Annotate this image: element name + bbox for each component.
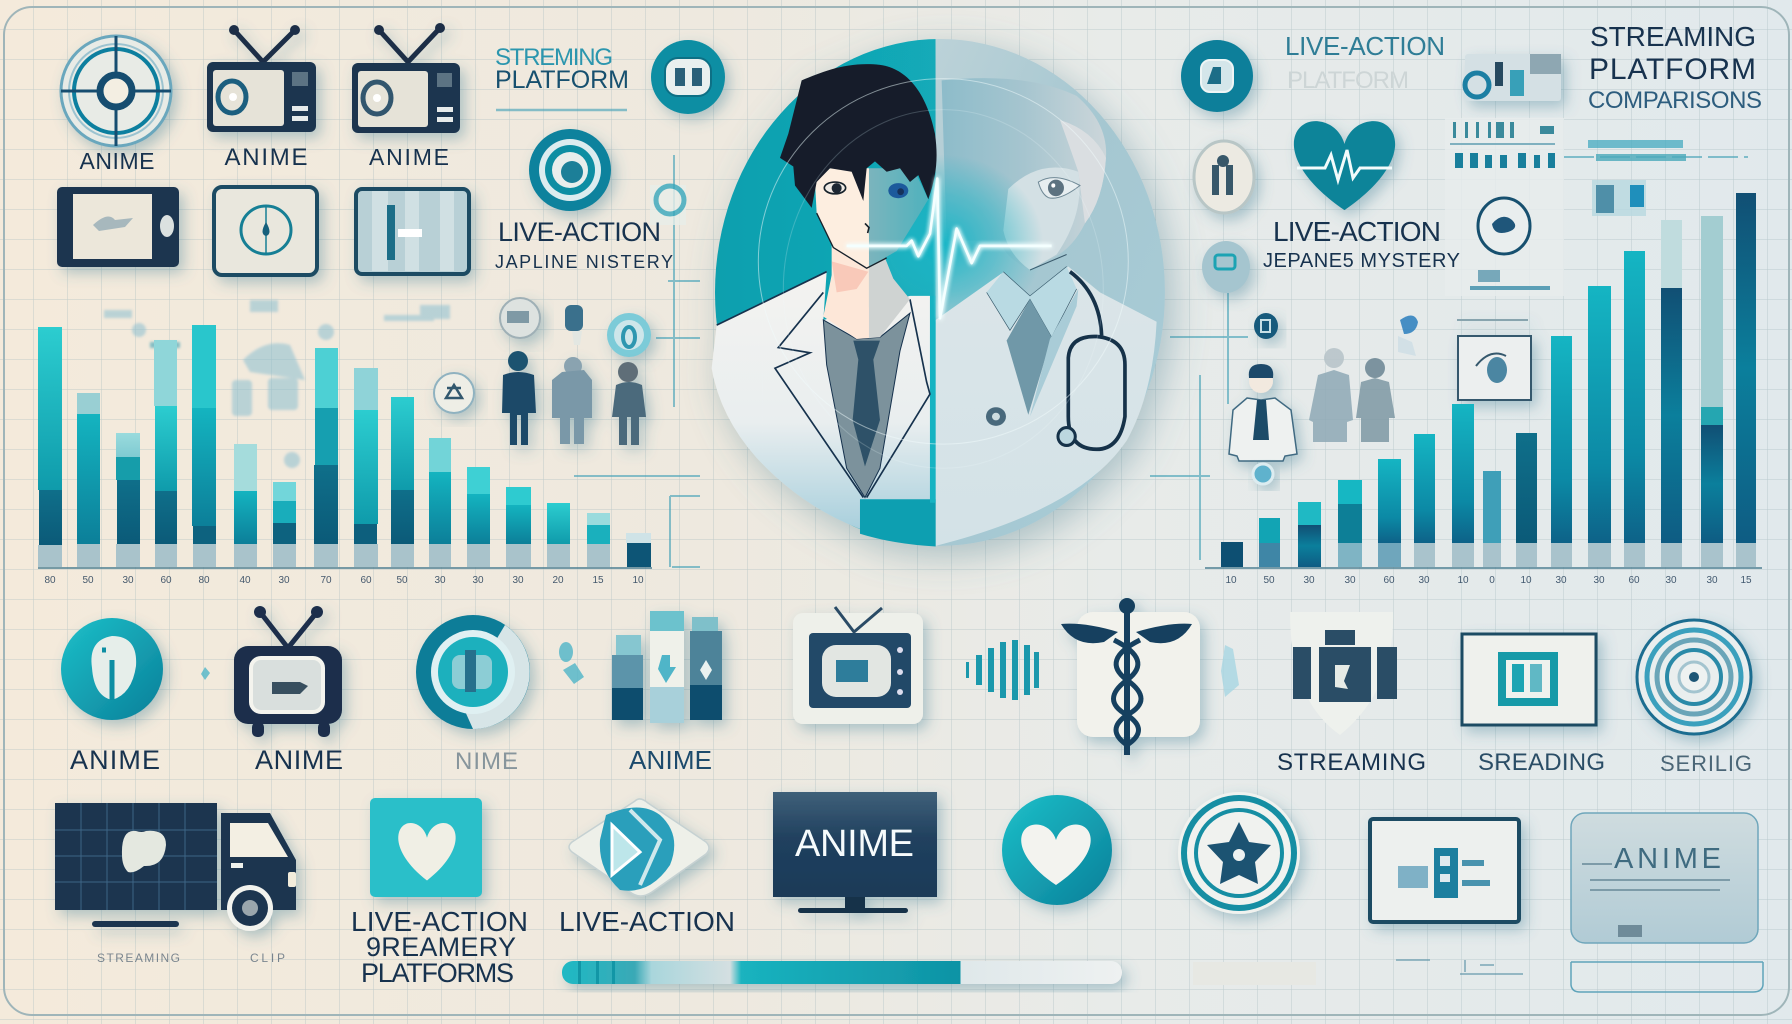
icon: framed television card: [793, 607, 923, 724]
label: anime on card: ANIME: [1614, 843, 1721, 875]
bar 14: [547, 503, 570, 567]
right figure hair and face: [942, 78, 1106, 270]
icon: small dark badge: [1254, 313, 1278, 339]
heading: streaming platform left: [495, 44, 629, 94]
icon: concentric spiral: [1637, 620, 1751, 734]
icon: caduceus card: [1061, 598, 1200, 755]
stethoscope: [1058, 272, 1125, 449]
bar 12: [1624, 251, 1645, 567]
axis labels: left chart: 50: [396, 575, 408, 586]
axis labels: left chart: 15: [592, 575, 604, 586]
bar 8: [314, 348, 338, 567]
axis labels: right chart: 0: [1489, 575, 1495, 586]
heading: live-action breamery platforms: LIVE-ACTION: [351, 906, 528, 937]
bar 4: [1338, 480, 1362, 567]
heading: live-action breamery platforms: PLATFORMS: [361, 958, 514, 988]
axis labels: left chart: 10: [632, 575, 644, 586]
axis labels: right chart: 50: [1263, 575, 1275, 586]
icon: segmented ring: [416, 615, 530, 729]
axis labels: right chart: 10: [1520, 575, 1532, 586]
heading: live-action right: LIVE-ACTION: [1285, 31, 1445, 61]
axis labels: right chart: 30: [1706, 575, 1718, 586]
heading: streaming platform comparisons: PLATFORM: [1589, 53, 1756, 86]
bar 4: [154, 340, 177, 567]
heading: streaming platform left: STREMING: [495, 44, 613, 71]
bar 14: [1701, 216, 1723, 567]
faded caption under truck: [97, 951, 285, 965]
axis labels: right chart: 60: [1628, 575, 1640, 586]
icon: teal badge right: [1181, 40, 1253, 112]
icon: heart with pulse: [1294, 121, 1395, 210]
bar 10: [1551, 336, 1572, 567]
icon: television 1: [207, 25, 316, 132]
bar 15: [587, 513, 610, 567]
heading: streaming platform comparisons: [1588, 21, 1762, 114]
icon: teal circle with glyph: [61, 618, 163, 720]
label: anime 2: ANIME: [224, 144, 308, 171]
connector lines: right: [1150, 157, 1748, 560]
bar 6: [1414, 434, 1435, 567]
panel: mini data board: [1445, 118, 1564, 296]
axis labels: left chart: 20: [552, 575, 564, 586]
axis labels: left chart: 60: [360, 575, 372, 586]
icon: diamond play: [569, 799, 709, 896]
axis labels: left chart: 30: [278, 575, 290, 586]
label: streaming: STREAMING: [1277, 749, 1426, 776]
icon: framed document: [1370, 819, 1519, 922]
bar 5: [1378, 459, 1401, 567]
left figure neck and face: [815, 168, 928, 339]
bar 10: [391, 397, 414, 567]
progress bar: [562, 961, 1122, 984]
faded lines caption: [1396, 960, 1523, 974]
axis labels: right chart: 10: [1225, 575, 1237, 586]
icon: star badge: [1178, 792, 1300, 914]
axis labels: right chart: 60: [1383, 575, 1395, 586]
axis labels: left chart: 80: [44, 575, 56, 586]
icon: framed circle: [214, 187, 317, 275]
axis labels: right chart: [1225, 575, 1752, 586]
icon: ring clock: [1194, 141, 1254, 213]
axis labels: right chart: 10: [1457, 575, 1469, 586]
icon: framed striped screen: [356, 189, 469, 274]
icon: television 2: [352, 23, 460, 133]
icon: framed teal square: [1462, 634, 1596, 725]
central teal glow: [843, 154, 1043, 334]
icon: tablet with sketch: [57, 187, 179, 267]
icon: teal badge top: [651, 40, 725, 114]
heartbeat line: [847, 179, 1052, 318]
heading: streaming platform comparisons: COMPARISONS: [1588, 87, 1762, 114]
bar 6: [234, 444, 257, 567]
axis labels: left chart: 30: [122, 575, 134, 586]
faded caption under truck: CLIP: [250, 951, 285, 965]
bar 13: [506, 487, 531, 567]
bar 2: [77, 393, 100, 567]
right figure coat: [936, 267, 1157, 546]
icon: small gray disk: [500, 298, 540, 338]
label: anime 3: ANIME: [369, 144, 449, 170]
left figure coat: [712, 272, 936, 547]
heading: streaming platform left: PLATFORM: [495, 66, 629, 94]
bar 3: [1298, 502, 1321, 567]
icon: book columns: [612, 611, 722, 723]
bar 13: [1661, 220, 1682, 567]
icon: collage panel: [1465, 54, 1561, 101]
axis labels: left chart: [44, 575, 644, 586]
bar 3: [116, 433, 140, 567]
axis labels: right chart: 30: [1665, 575, 1677, 586]
icon: truck: [55, 803, 296, 931]
small decorative blob: [1221, 645, 1239, 697]
subheading: japline mystery: JAPLINE NISTERY: [495, 252, 673, 272]
bar 12: [467, 467, 490, 567]
heading: live-action lower: LIVE-ACTION: [559, 906, 735, 937]
axis labels: left chart: 40: [239, 575, 251, 586]
bar 9: [354, 368, 378, 567]
axis labels: left chart: 50: [82, 575, 94, 586]
bar 2: [1259, 518, 1280, 567]
label: anime lower 2: ANIME: [255, 745, 343, 775]
label: anime 1: ANIME: [80, 148, 154, 174]
axis labels: right chart: 30: [1303, 575, 1315, 586]
icon: small circle badge: [434, 373, 474, 413]
icon: live-action group: [1309, 348, 1395, 442]
label: serilig: SERILIG: [1660, 751, 1752, 776]
label: spreading: SREADING: [1478, 749, 1605, 776]
axis labels: left chart: 30: [472, 575, 484, 586]
icon: cyan disc: [607, 313, 651, 357]
label: anime lower 1: ANIME: [70, 745, 160, 775]
icon: teal card with heart: [370, 798, 482, 897]
panel: anime card: [1571, 813, 1763, 992]
bar chart: live-action rising: [1205, 193, 1762, 568]
icon: strip of small indicators: [1588, 140, 1686, 216]
axis labels: left chart: 30: [512, 575, 524, 586]
icon: streaming blocks: [1290, 612, 1397, 735]
heading: streaming platform comparisons: STREAMING: [1590, 21, 1756, 52]
heading: live-action breamery platforms: [351, 906, 528, 988]
axis labels: right chart: 30: [1593, 575, 1605, 586]
icon: navy television: [234, 606, 342, 737]
bar 7: [273, 482, 296, 567]
pale placeholder strip: [1193, 962, 1316, 985]
heading: live-action breamery platforms: 9REAMERY: [366, 932, 516, 962]
icon: doctor figure: [1229, 364, 1297, 461]
faded label: platform: PLATFORM: [1287, 67, 1409, 94]
bar 15: [1736, 193, 1756, 567]
label: partial anime: NIME: [455, 748, 518, 775]
bar 1: [1221, 542, 1243, 567]
icon: small teal disc: [1202, 241, 1250, 293]
glow rings: [758, 79, 1128, 468]
bar 11: [429, 438, 451, 567]
axis labels: right chart: 15: [1740, 575, 1752, 586]
left figure hair: [780, 64, 937, 208]
bar 16: [626, 533, 651, 567]
label: anime lower 4: ANIME: [629, 745, 712, 775]
icon: small blue robot: [1398, 315, 1418, 356]
connector lines: left: [496, 110, 700, 567]
faded sketch fragments over left chart: [104, 300, 450, 468]
bar 7: [1452, 404, 1474, 567]
icon: teal heart circle: [1002, 795, 1112, 905]
small decorative marker: [201, 642, 584, 684]
icon: small cyan marker: [650, 185, 686, 225]
axis labels: right chart: 30: [1555, 575, 1567, 586]
subheading: japanese mystery: JEPANE5 MYSTERY: [1263, 250, 1460, 272]
icon: ring target: [529, 129, 611, 211]
small teal pin: [1253, 464, 1273, 484]
bar chart: anime declining: [38, 325, 652, 568]
icon: framed eye sketch: [1457, 320, 1531, 400]
axis labels: right chart: 30: [1344, 575, 1356, 586]
heading: live-action center right: LIVE-ACTION: [1273, 216, 1441, 247]
heading: live-action left: LIVE-ACTION: [498, 217, 661, 247]
icon: small figure: [565, 305, 583, 345]
bar 9: [1516, 433, 1537, 567]
central portrait: anime and live-action doctors: [710, 34, 1169, 551]
bar 5: [192, 325, 216, 567]
bar 11: [1588, 286, 1611, 567]
bar 1: [38, 327, 62, 567]
icon: target emblem: [61, 36, 171, 146]
axis labels: left chart: 70: [320, 575, 332, 586]
people icons: anime group: [502, 351, 646, 445]
axis labels: left chart: 80: [198, 575, 210, 586]
axis labels: left chart: 60: [160, 575, 172, 586]
label: anime on monitor: ANIME: [795, 823, 914, 865]
icon: anime monitor: [773, 792, 937, 913]
faded caption under truck: STREAMING: [97, 951, 180, 965]
axis labels: right chart: 30: [1418, 575, 1430, 586]
bar 8: [1483, 471, 1501, 567]
icon: sound wave: [966, 640, 1039, 700]
axis labels: left chart: 30: [434, 575, 446, 586]
